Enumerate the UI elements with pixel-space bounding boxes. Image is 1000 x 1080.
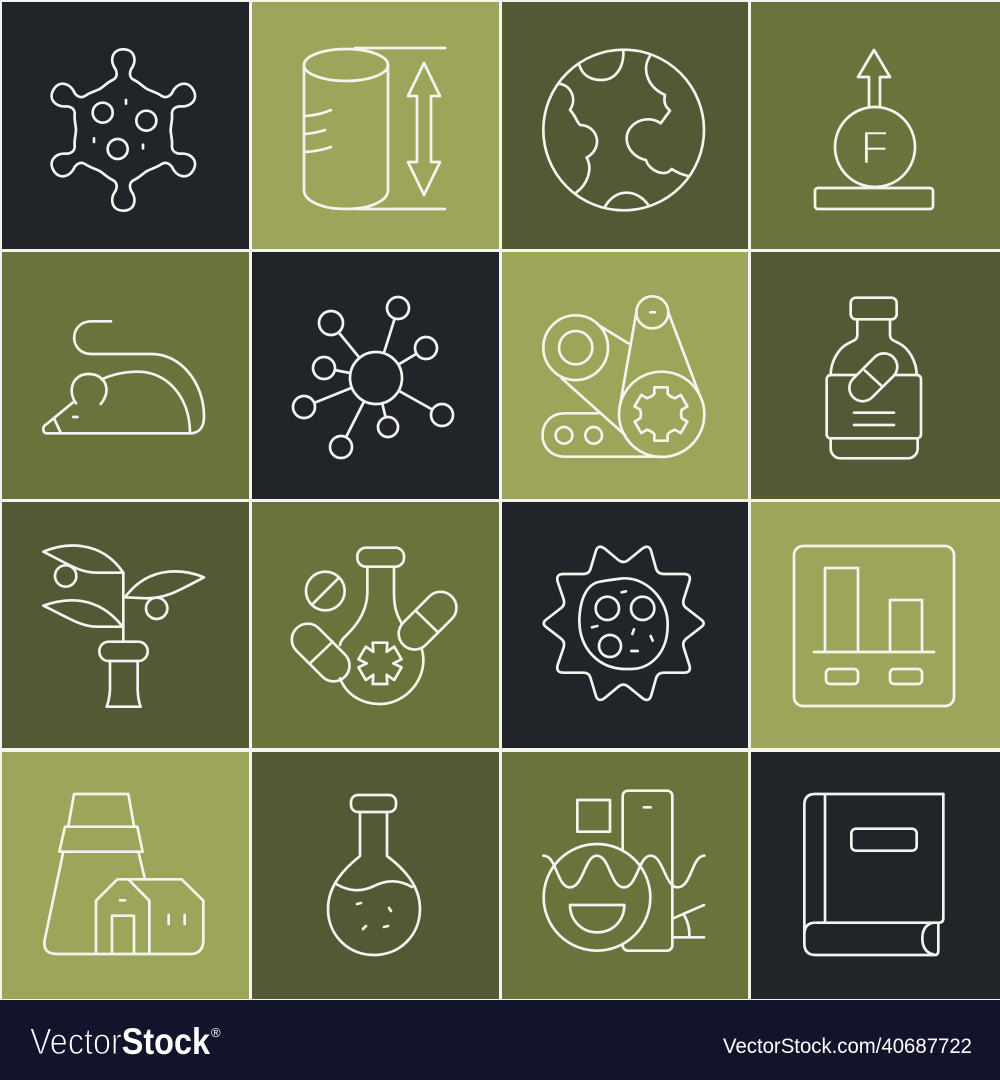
icon: fluorine element rising: F — [860, 122, 889, 174]
icon: bar chart card — [794, 546, 954, 706]
icon: smiley, bars and wave — [543, 791, 704, 951]
panel: factory — [2, 752, 249, 999]
icon: medical flask with pills — [285, 548, 463, 704]
footer bar — [0, 1000, 1000, 1080]
panel: book — [751, 752, 1000, 999]
icon: spiked cell — [544, 547, 704, 700]
panel: fluorine — [751, 2, 1000, 249]
panel: flask and pills — [252, 502, 499, 748]
image id text: VectorStock.com/40687722 — [723, 1035, 972, 1058]
panel: belt drive — [502, 252, 748, 499]
icon: cylinder with height arrow — [304, 48, 445, 209]
panel: cylinder — [252, 2, 499, 249]
icon: book — [804, 794, 943, 955]
panel: bar chart — [751, 502, 1000, 748]
icon: plant with berries — [43, 546, 204, 707]
logo text: VectorStock — [30, 1021, 210, 1062]
icon: cooling tower and buildings — [44, 794, 203, 954]
icon: lab mouse — [43, 321, 204, 433]
panel: cell — [502, 502, 748, 748]
icon: virus — [42, 49, 205, 211]
icon: fluorine element rising — [815, 50, 933, 209]
panel: mouse — [2, 252, 249, 499]
panel: chemical experiment — [502, 752, 748, 999]
icon: round flask with liquid — [328, 795, 420, 955]
panel: earth — [502, 2, 748, 249]
panel: medicine bottle — [751, 252, 1000, 499]
panel: flask — [252, 752, 499, 999]
icon: belt drive with gear — [542, 296, 704, 457]
icon: medicine bottle with capsule — [827, 298, 921, 458]
icon: molecule network — [293, 297, 453, 458]
panel: molecule — [252, 252, 499, 499]
panel: plant — [2, 502, 249, 748]
registered mark: ® — [211, 1025, 221, 1040]
icon: earth globe — [543, 50, 704, 210]
panel: virus — [2, 2, 249, 249]
